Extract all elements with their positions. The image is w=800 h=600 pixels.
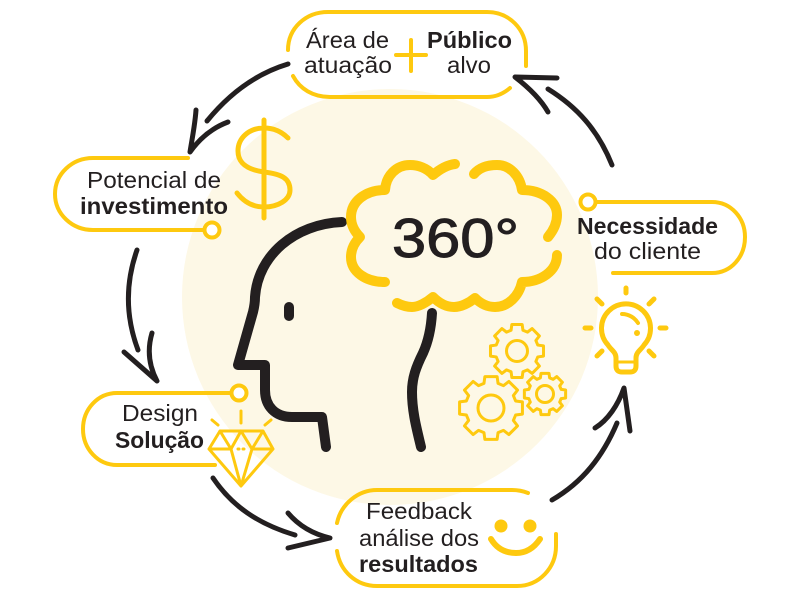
panel: area de atuacao + publico alvo: Área de bbox=[306, 27, 389, 53]
panel: feedback analise dos resultados: resultados bbox=[359, 551, 478, 577]
background circle bbox=[182, 89, 598, 505]
panel: area de atuacao + publico alvo: atuação bbox=[304, 52, 392, 78]
panel: necessidade do cliente: do cliente bbox=[594, 238, 701, 264]
thought cloud bbox=[351, 164, 557, 307]
icon: light bulb bbox=[585, 288, 666, 372]
arrow: design to feedback bbox=[213, 478, 330, 548]
panel: necessidade do cliente: Necessidade bbox=[577, 213, 718, 239]
panel: feedback analise dos resultados bbox=[337, 490, 556, 586]
panel: feedback analise dos resultados: análise dos bbox=[359, 525, 479, 551]
arrow: necessidade to top panel bbox=[515, 77, 612, 165]
panel: design solucao: Design bbox=[122, 400, 198, 426]
arrow: feedback to bulb bbox=[552, 388, 630, 500]
icon: eye bbox=[284, 307, 294, 316]
icon: gears bbox=[460, 324, 566, 439]
panel: design solucao: Solução bbox=[115, 427, 204, 453]
icon: diamond bbox=[209, 411, 273, 486]
arrow: top panel to potencial bbox=[190, 64, 288, 152]
panel: feedback analise dos resultados: Feedback bbox=[366, 498, 473, 524]
panel: area de atuacao + publico alvo: alvo bbox=[447, 52, 491, 78]
heading: 360 degrees: 360° bbox=[392, 207, 519, 269]
panel: potencial de investimento: Potencial de bbox=[87, 167, 221, 193]
panel: potencial de investimento: investimento bbox=[80, 193, 228, 219]
panel: area de atuacao + publico alvo bbox=[288, 12, 526, 97]
panel: design solucao bbox=[83, 386, 246, 465]
icon: dollar sign bbox=[237, 120, 290, 218]
head silhouette bbox=[238, 222, 432, 447]
icon: smiley bbox=[491, 520, 540, 553]
icon: plus bbox=[396, 40, 426, 71]
panel: necessidade do cliente bbox=[577, 194, 745, 273]
panel: area de atuacao + publico alvo: Público bbox=[427, 27, 512, 53]
panel: potencial de investimento bbox=[55, 158, 228, 238]
arrow: potencial to design bbox=[124, 250, 157, 381]
